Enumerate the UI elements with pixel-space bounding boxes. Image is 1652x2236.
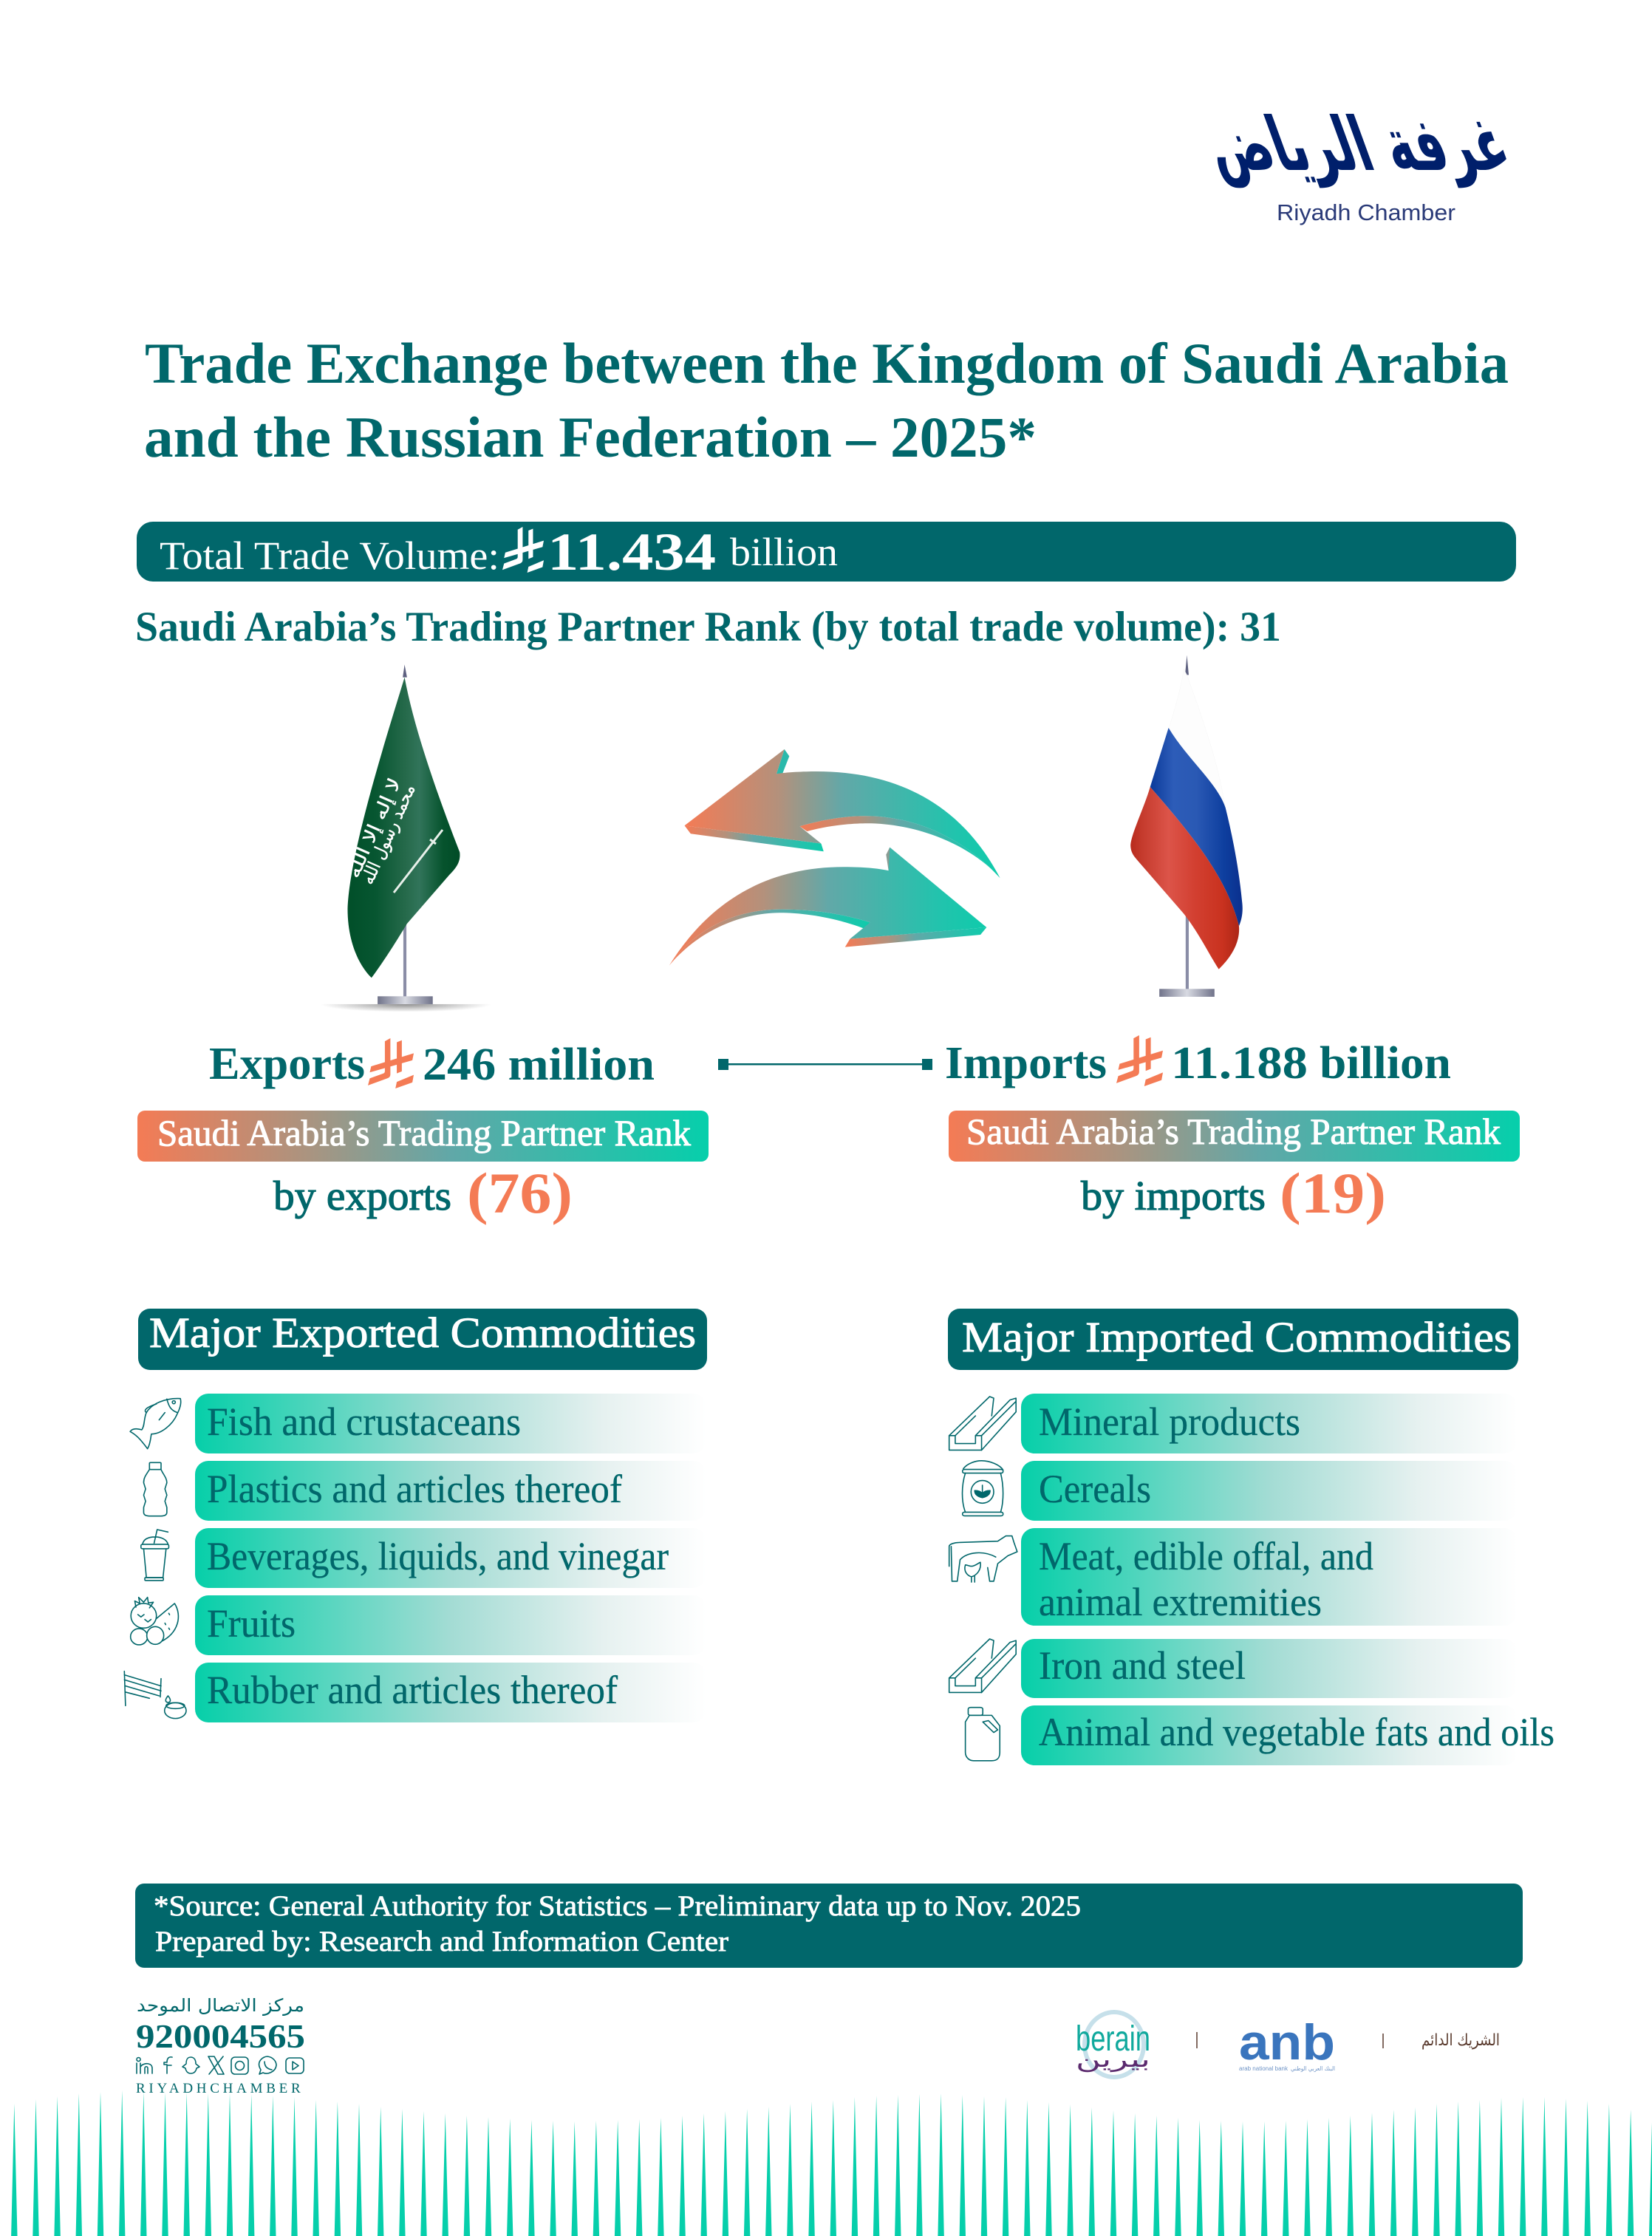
title: and the Russian Federation – 2025* xyxy=(144,405,1037,469)
icon: channel beam xyxy=(949,1639,1016,1692)
item: iron and steel xyxy=(1021,1639,1518,1698)
item: mineral products: Mineral products xyxy=(1039,1400,1300,1444)
item: fruits: Fruits xyxy=(207,1601,296,1646)
sponsor logo: berain: بيرين xyxy=(1076,2047,1150,2073)
panel: imports rank: by imports xyxy=(1081,1173,1266,1219)
panel: exports rank: by exports xyxy=(273,1173,451,1219)
icon: fish xyxy=(130,1399,181,1449)
heading: Major Imported Commodities xyxy=(962,1313,1512,1361)
item: plastics xyxy=(195,1461,706,1521)
item: fats and oils xyxy=(1021,1705,1554,1765)
item: rubber: Rubber and articles thereof xyxy=(207,1668,618,1712)
item: cereals xyxy=(1021,1461,1518,1521)
icon: livestock xyxy=(949,1536,1017,1582)
item: fish xyxy=(195,1394,706,1453)
total trade volume banner: billion xyxy=(730,530,838,574)
total trade volume banner xyxy=(137,522,1516,582)
contact block xyxy=(136,1995,305,2096)
arrow pointing right xyxy=(669,848,986,966)
overall trading partner rank: Saudi Arabia’s Trading Partner Rank (by total trade volume): 31 xyxy=(135,604,1281,650)
exports value xyxy=(209,1038,655,1090)
panel: exports rank: (76) xyxy=(467,1161,573,1225)
item: iron and steel: Iron and steel xyxy=(1039,1643,1246,1688)
panel: major exported commodities xyxy=(124,1309,707,1722)
imports value: 11.188 xyxy=(1171,1038,1308,1088)
panel: exports rank xyxy=(137,1111,709,1225)
title xyxy=(144,331,1509,469)
logo: Riyadh Chamber: Riyadh Chamber xyxy=(1277,200,1455,225)
item: cereals: Cereals xyxy=(1039,1467,1151,1511)
icon: riyal sign white xyxy=(502,527,544,573)
icon: channel beam xyxy=(949,1397,1016,1450)
panel: major imported commodities xyxy=(948,1309,1554,1765)
panel: exports rank: Saudi Arabia’s Trading Partner Rank xyxy=(157,1112,691,1153)
social icons xyxy=(137,2056,304,2074)
shahada inscription: لا إله إلا الله xyxy=(343,775,406,882)
total trade volume banner: Total Trade Volume: xyxy=(160,534,499,578)
arrow pointing left xyxy=(685,749,1000,878)
logo: Riyadh Chamber xyxy=(1192,102,1522,225)
heading: Major Exported Commodities xyxy=(149,1309,696,1357)
source note banner: Prepared by: Research and Information Center xyxy=(155,1926,728,1957)
item: fats and oils: Animal and vegetable fats and oils xyxy=(1039,1710,1554,1754)
decorative spikes xyxy=(11,2090,1652,2236)
item: meat xyxy=(1021,1528,1518,1626)
source note banner: *Source: General Authority for Statistics – Preliminary data up to Nov. 2025 xyxy=(154,1890,1081,1922)
sponsor logo: berain xyxy=(1076,2012,1150,2077)
permanent partner label: الشريك الدائم xyxy=(1421,2031,1500,2050)
exports value: 246 million xyxy=(423,1040,655,1090)
flag: Russia xyxy=(1130,655,1243,997)
icon: riyal sign orange xyxy=(1116,1035,1163,1086)
contact block: RIYADHCHAMBER xyxy=(136,2081,305,2096)
icon: fruits xyxy=(131,1598,178,1645)
title: Trade Exchange between the Kingdom of Saudi Arabia xyxy=(145,331,1509,395)
exports value: Exports xyxy=(209,1039,365,1089)
arrows: two-way trade exchange xyxy=(669,749,1000,966)
shahada inscription: محمد رسول الله xyxy=(357,781,420,887)
contact block: مركز الاتصال الموحد xyxy=(137,1995,304,2016)
item: beverages: Beverages, liquids, and vinegar xyxy=(207,1534,669,1578)
icon: cup xyxy=(141,1530,168,1581)
panel: imports rank xyxy=(949,1111,1520,1225)
partner separators xyxy=(1197,2032,1383,2048)
sponsor logo: arab national bank: anb xyxy=(1239,2014,1335,2070)
sword xyxy=(394,830,443,893)
icon: sack xyxy=(963,1461,1003,1516)
icon: oil jug xyxy=(966,1708,1000,1761)
sponsor logo: arab national bank: البنك العربي الوطني xyxy=(1291,2065,1335,2072)
contact block: 920004565 xyxy=(136,2017,305,2055)
icon: rubber tree xyxy=(124,1671,186,1719)
icon: bottle xyxy=(143,1462,167,1516)
flag: Saudi Arabia xyxy=(320,664,491,1020)
total trade volume banner: 11.434 xyxy=(547,522,716,582)
icon: riyal sign orange xyxy=(368,1038,414,1088)
source note banner xyxy=(135,1884,1523,1968)
sponsor logo: arab national bank: arab national bank xyxy=(1239,2065,1289,2072)
imports value: billion xyxy=(1320,1038,1451,1088)
item: meat: animal extremities xyxy=(1039,1580,1322,1624)
panel: imports rank: Saudi Arabia’s Trading Partner Rank xyxy=(966,1111,1501,1152)
sponsor logo: berain: berain xyxy=(1076,2019,1150,2059)
item: mineral products xyxy=(1021,1394,1518,1453)
item: plastics: Plastics and articles thereof xyxy=(207,1467,622,1511)
item: rubber xyxy=(195,1663,706,1722)
item: fish: Fish and crustaceans xyxy=(207,1400,521,1444)
imports value xyxy=(945,1035,1451,1088)
item: meat: Meat, edible offal, and xyxy=(1039,1534,1373,1578)
panel: imports rank: (19) xyxy=(1280,1161,1386,1225)
connector between exports and imports xyxy=(718,1059,932,1070)
item: fruits xyxy=(195,1595,706,1655)
imports value: Imports xyxy=(945,1038,1107,1088)
